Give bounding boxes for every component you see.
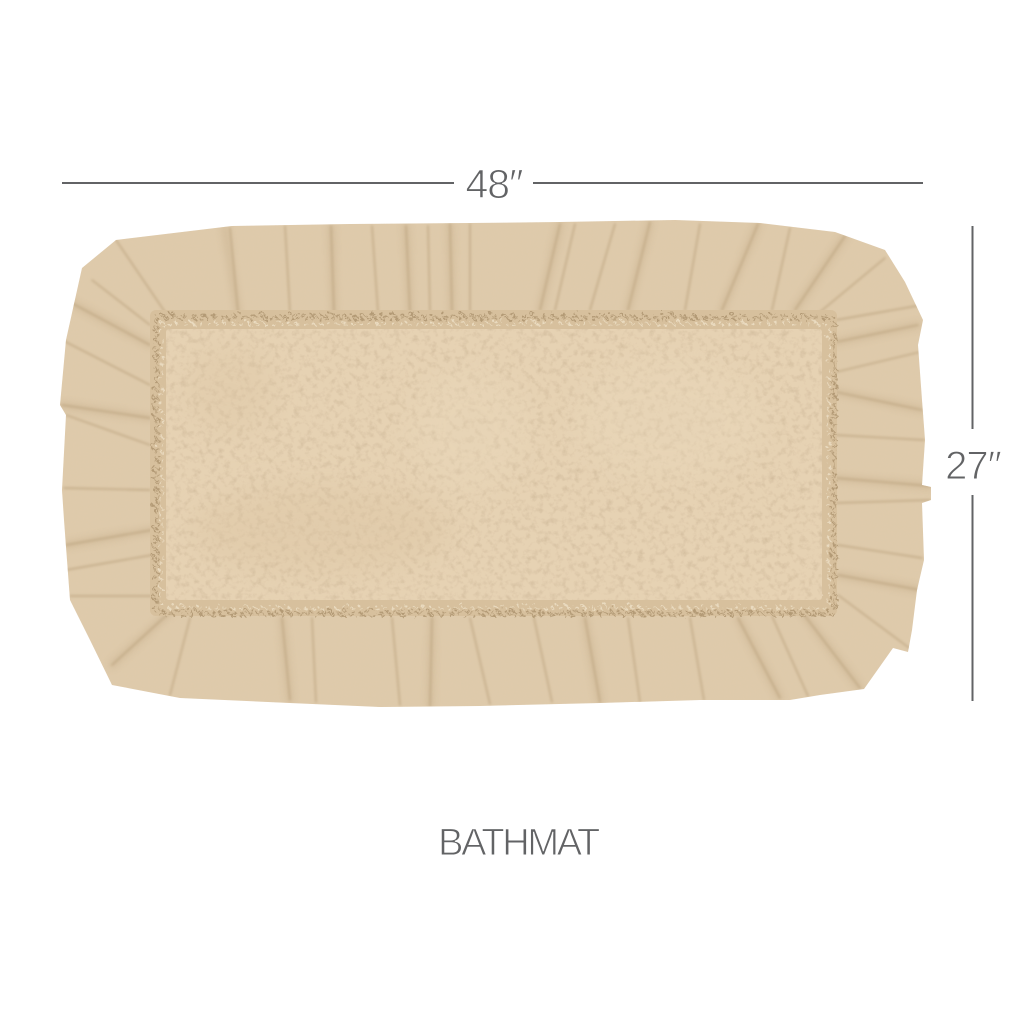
ruffled fabric border (60, 220, 931, 707)
width dimension: 48 inches: 48″ (465, 161, 523, 207)
label: product name: BATHMAT (438, 822, 600, 864)
height dimension: 27 inches: 27″ (945, 444, 1002, 488)
shirred inner band (150, 310, 837, 616)
soft pleat shading (62, 222, 930, 706)
ruffle pleats (62, 222, 930, 706)
pile light and shadow patches (185, 345, 765, 575)
plush centre pile (166, 329, 822, 600)
bathmat product (60, 220, 931, 707)
gathered ruffle stitching (152, 313, 833, 612)
crisp pleat lines (62, 222, 930, 706)
